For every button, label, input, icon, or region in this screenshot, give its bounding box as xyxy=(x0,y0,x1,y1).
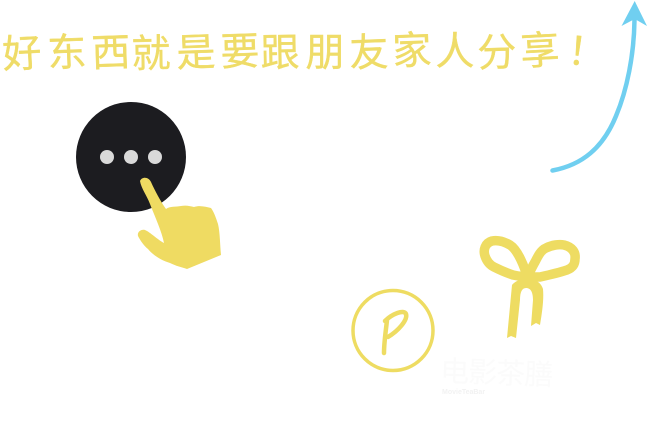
icon: P badge xyxy=(353,290,433,370)
watermark: 电影茶膳 xyxy=(440,355,554,392)
title: ！ xyxy=(565,30,609,77)
title: 要 xyxy=(220,30,260,75)
title: 就 xyxy=(131,33,171,76)
title xyxy=(1,29,609,77)
icon: tapping on more menu xyxy=(76,102,221,269)
arrow xyxy=(552,1,647,170)
title: 西 xyxy=(91,31,131,76)
title: 友 xyxy=(349,31,389,76)
icon: gift ribbon xyxy=(484,241,575,338)
title: 家 xyxy=(392,29,432,74)
title: 朋 xyxy=(305,32,344,75)
title: 跟 xyxy=(260,32,300,75)
icon: pointing hand xyxy=(138,178,221,269)
watermark: MovieTeaBar xyxy=(442,389,485,396)
title: 享 xyxy=(519,29,561,74)
title: 好 xyxy=(1,32,43,77)
title: 是 xyxy=(176,31,216,76)
title: 人 xyxy=(435,31,474,74)
title: 东 xyxy=(47,31,87,76)
title: 分 xyxy=(477,31,517,76)
menu button xyxy=(76,102,186,212)
